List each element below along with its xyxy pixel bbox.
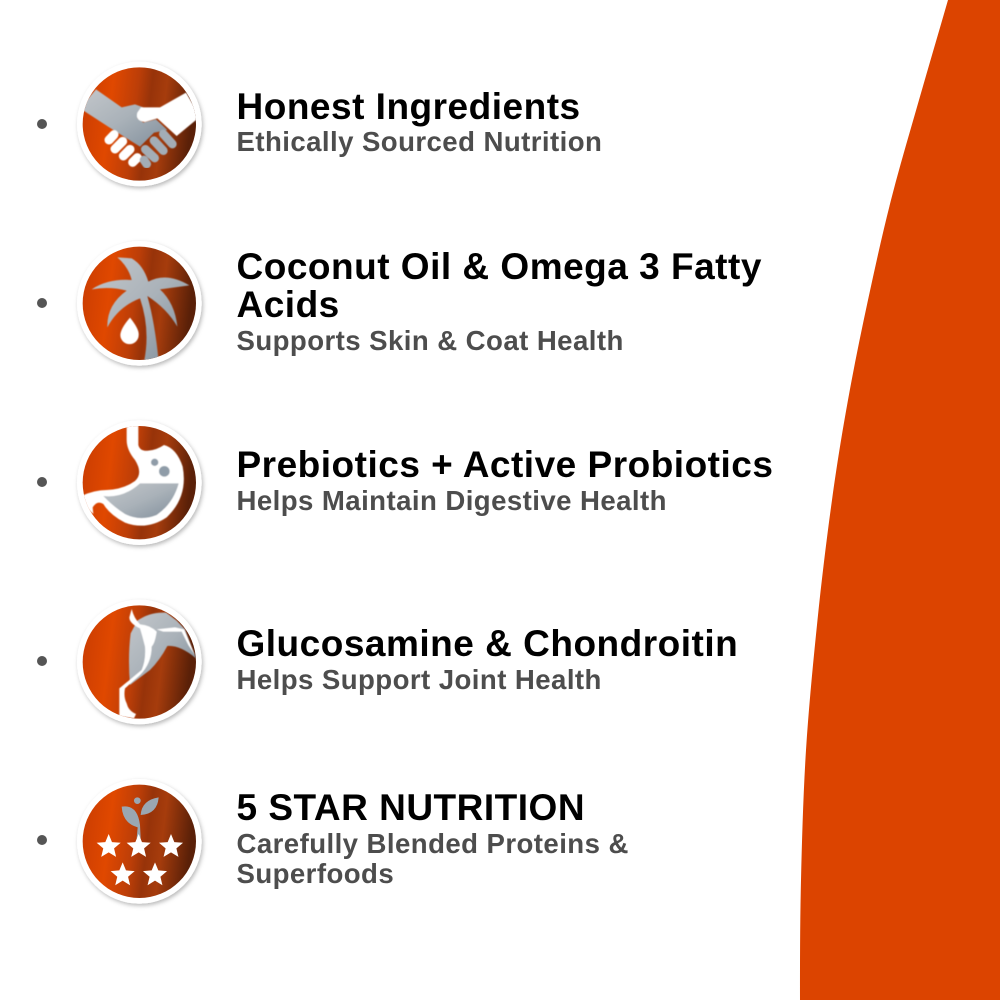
orange curved panel — [800, 0, 1000, 1000]
heading: 5 STAR NUTRITION — [236, 787, 585, 828]
bullet — [37, 477, 47, 487]
icon: horse leg joint — [77, 600, 202, 724]
item: glucosamine — [37, 600, 738, 724]
icon: palm tree and oil drop — [77, 241, 202, 366]
icon: sprout and five stars — [77, 779, 202, 904]
bullet — [37, 835, 47, 845]
icon: stomach — [77, 420, 202, 545]
bullet — [37, 298, 47, 308]
subheading: Supports Skin & Coat Health — [236, 325, 624, 356]
subheading: Helps Maintain Digestive Health — [236, 485, 667, 516]
item: honest ingredients — [37, 62, 602, 186]
heading: Honest Ingredients — [236, 86, 581, 127]
subheading: Ethically Sourced Nutrition — [236, 126, 602, 157]
bullet — [37, 656, 47, 666]
subheading: Helps Support Joint Health — [236, 664, 602, 695]
heading: Glucosamine & Chondroitin — [236, 623, 738, 664]
item: prebiotics — [37, 420, 773, 545]
heading second line: Acids — [236, 284, 340, 325]
subheading second line: Superfoods — [236, 858, 394, 889]
item: coconut oil — [37, 241, 762, 366]
item: 5 star nutrition — [37, 779, 629, 904]
heading: Prebiotics + Active Probiotics — [236, 444, 773, 485]
icon: handshake — [77, 62, 202, 186]
bullet — [37, 119, 47, 129]
subheading: Carefully Blended Proteins & — [236, 828, 629, 859]
heading: Coconut Oil & Omega 3 Fatty — [236, 246, 762, 287]
